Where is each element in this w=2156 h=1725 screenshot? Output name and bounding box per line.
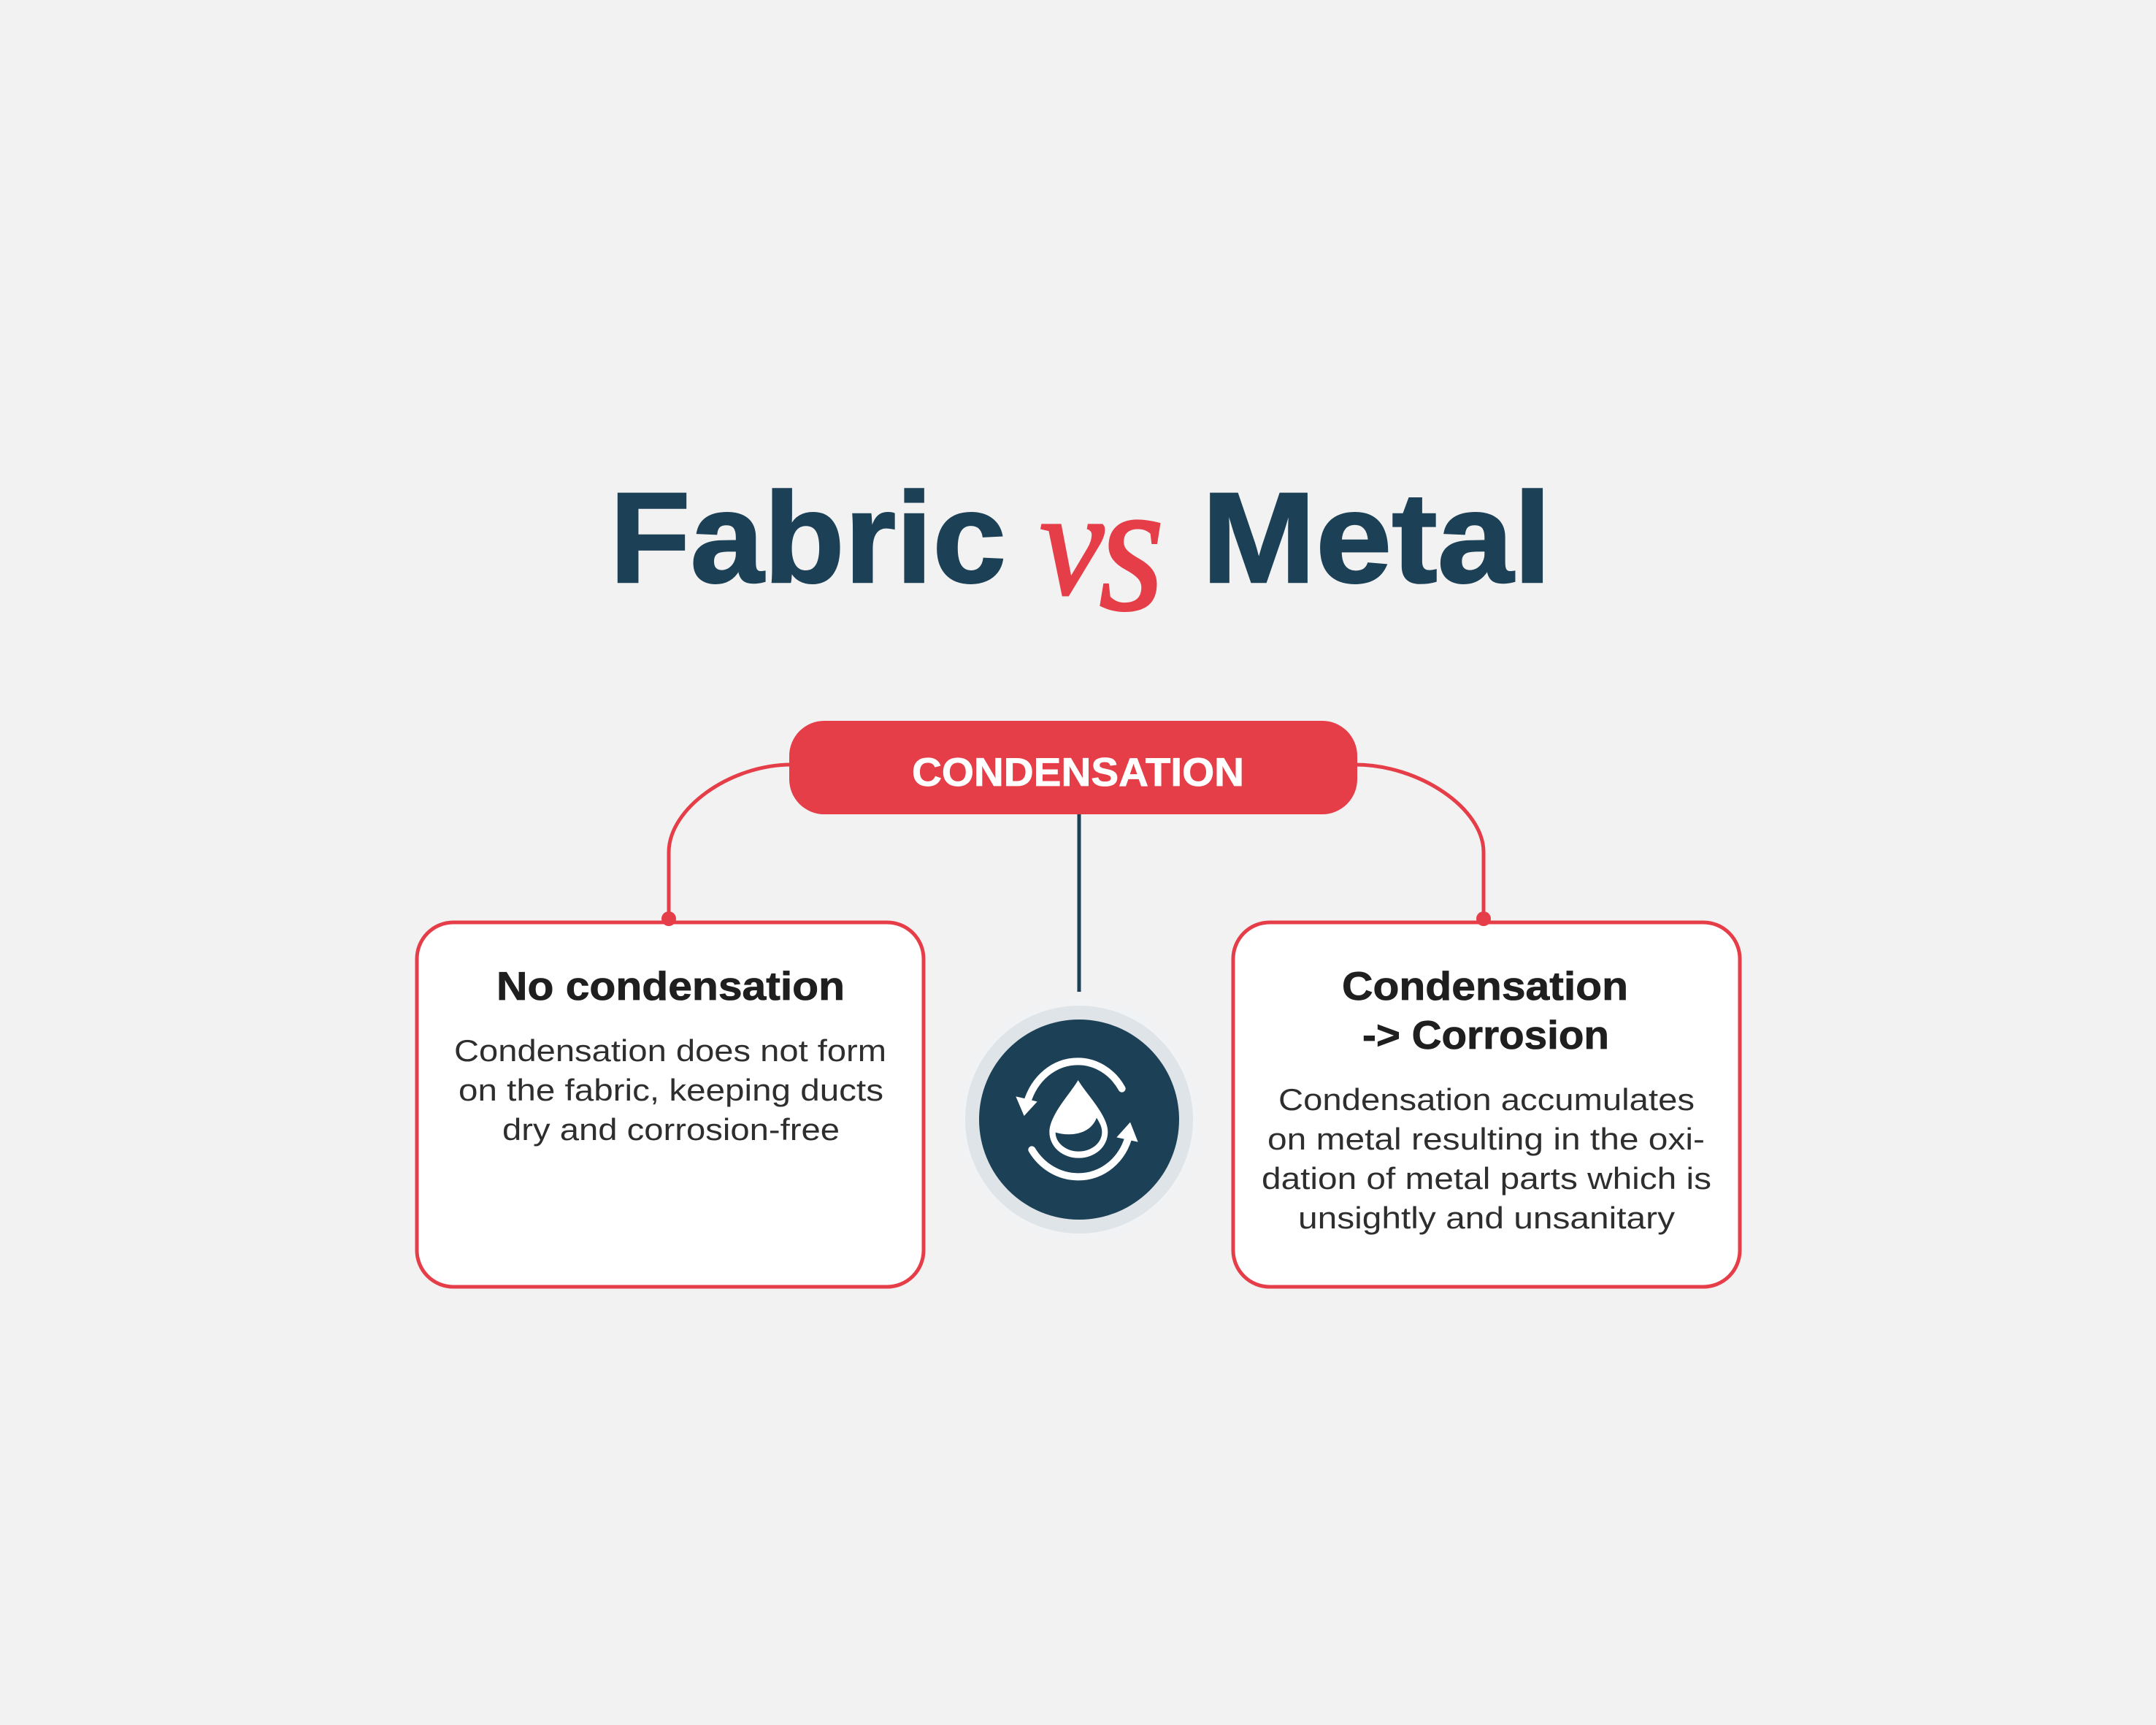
title: s [1099,442,1165,650]
connector dot: left [661,911,676,926]
panel: no condensation [417,911,924,1287]
panel: condensation to corrosion [1233,911,1740,1287]
title [610,442,1551,650]
title: Fabric [610,467,1006,610]
connector: left curve [669,765,791,919]
heading: condensation corrosion [1342,963,1628,1057]
text block: fabric description: on the fabric, keeping ducts [459,1073,883,1107]
heading pill: condensation [789,721,1357,814]
text block: metal description: unsightly and unsanitary [1298,1201,1675,1235]
connector: center line [1078,814,1081,992]
text block: fabric description [454,1033,886,1147]
icon: water drop with cycle arrows [951,992,1207,1247]
heading: condensation corrosion: -> Corrosion [1362,1012,1609,1057]
text block: fabric description: dry and corrosion-free [502,1112,840,1147]
title: v [1040,461,1104,627]
text block: fabric description: Condensation does not form [454,1033,886,1068]
text block: metal description: on metal resulting in the oxi- [1267,1122,1705,1156]
text block: metal description: Condensation accumulates [1278,1082,1695,1117]
title: Metal [1202,467,1551,610]
connector: right curve [1355,765,1484,919]
text block: metal description: dation of metal parts which is [1262,1161,1711,1196]
heading: no condensation: No condensation [496,963,845,1009]
heading: condensation corrosion: Condensation [1342,963,1628,1009]
text block: metal description [1262,1082,1711,1235]
heading pill: condensation: CONDENSATION [912,749,1244,795]
connector dot: right [1476,911,1491,926]
